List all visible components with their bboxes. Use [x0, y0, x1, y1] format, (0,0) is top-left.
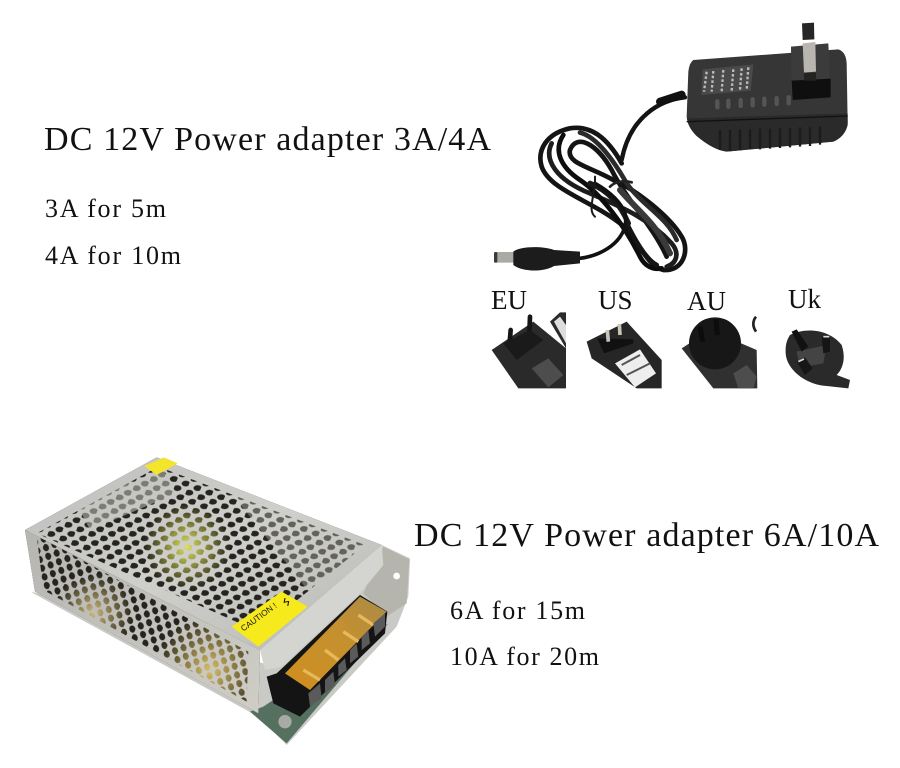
EU plug	[492, 312, 566, 388]
DC barrel plug	[494, 247, 580, 271]
US plug	[587, 322, 662, 388]
mounting flange and PCB	[32, 545, 410, 745]
terminal block	[267, 595, 387, 717]
text: 10A for 20m: 10A for 20m	[450, 642, 599, 671]
plug photos	[492, 312, 850, 388]
adapter body	[687, 23, 848, 152]
label: EU: EU	[491, 285, 527, 315]
photo: switching power supply	[25, 457, 410, 745]
plug head and prongs	[791, 43, 831, 99]
white terminal label strip	[260, 545, 383, 670]
label: AU: AU	[687, 286, 726, 316]
cable	[540, 95, 685, 270]
rating label	[701, 64, 753, 95]
photo: wall power adapter with cable	[494, 23, 848, 271]
side plate	[25, 530, 260, 713]
plug type labels	[491, 284, 821, 316]
text: 6A for 15m: 6A for 15m	[450, 596, 585, 625]
UK plug	[786, 329, 850, 388]
text: 4A for 10m: 4A for 10m	[45, 241, 181, 270]
label: US: US	[598, 285, 633, 315]
caution sticker	[232, 592, 308, 647]
heading: 3A/4A adapter: DC 12V Power adapter 3A/4A	[44, 121, 491, 158]
heading: 6A/10A adapter: DC 12V Power adapter 6A/10A	[414, 517, 879, 554]
AU plug	[682, 317, 757, 388]
text: 3A for 5m: 3A for 5m	[45, 194, 166, 223]
top plate	[25, 457, 382, 650]
caution sticker: CAUTION !	[239, 600, 279, 633]
caution sticker: ϟ	[282, 595, 291, 610]
label: Uk: Uk	[788, 284, 821, 314]
perforated case interior	[25, 457, 382, 713]
top yellow sticker	[144, 457, 178, 475]
